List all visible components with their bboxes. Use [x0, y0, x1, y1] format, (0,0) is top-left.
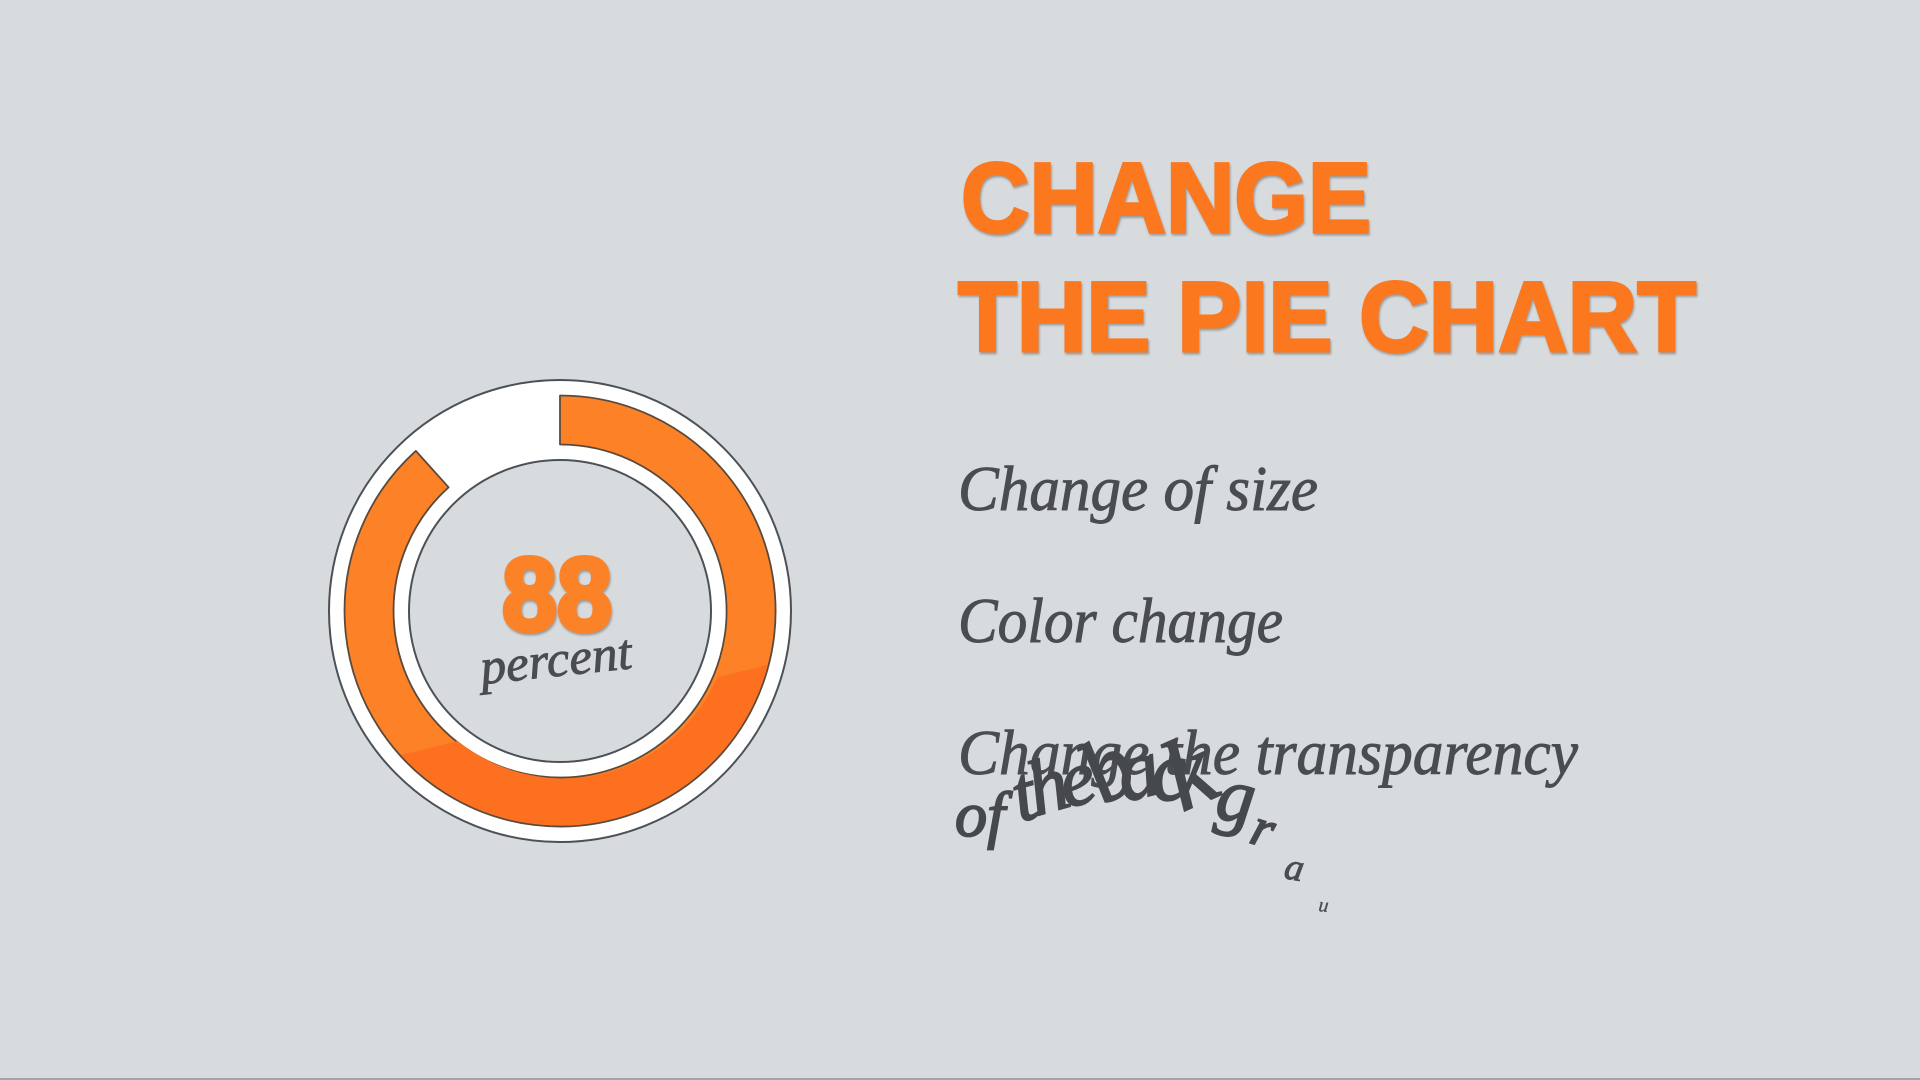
- title: CHANGE: [961, 142, 1371, 253]
- list item: change the transparency of the background, mid-animation: h: [1017, 738, 1078, 832]
- list item: change the transparency of the background, mid-animation: k: [1146, 712, 1233, 832]
- chart track ring: [329, 380, 791, 842]
- list item: change the transparency of the background, mid-animation: b: [1062, 715, 1153, 823]
- chart unit: percent: percent: [474, 623, 635, 695]
- list item: change the transparency of the background, mid-animation: r: [1244, 796, 1284, 860]
- donut chart: 88 percent: [329, 380, 791, 842]
- list item: change the transparency of the background, mid-animation: of: [955, 779, 1013, 850]
- list item: change the transparency of the background, mid-animation: Change the transparency: [958, 717, 1579, 788]
- list item: color change: Color change: [958, 585, 1283, 656]
- chart orange arc: [345, 396, 776, 826]
- list item: change the transparency of the background, mid-animation: [955, 712, 1579, 917]
- title: THE PIE CHART: [958, 261, 1696, 372]
- list item: change the transparency of the background, mid-animation: t: [1001, 748, 1048, 838]
- list item: change the transparency of the background, mid-animation: a: [1106, 720, 1169, 820]
- list item: change the transparency of the background, mid-animation: g: [1212, 752, 1261, 840]
- title: [958, 142, 1696, 372]
- list item: change the transparency of the background, mid-animation: e: [1049, 732, 1104, 824]
- list item: change the transparency of the background, mid-animation: u: [1317, 894, 1330, 917]
- list item: change of size: Change of size: [958, 453, 1318, 524]
- list item: change the transparency of the background, mid-animation: c: [1144, 724, 1194, 821]
- list item: change the transparency of the background, mid-animation: a: [1281, 846, 1307, 890]
- chart value: 88: 88: [502, 537, 612, 653]
